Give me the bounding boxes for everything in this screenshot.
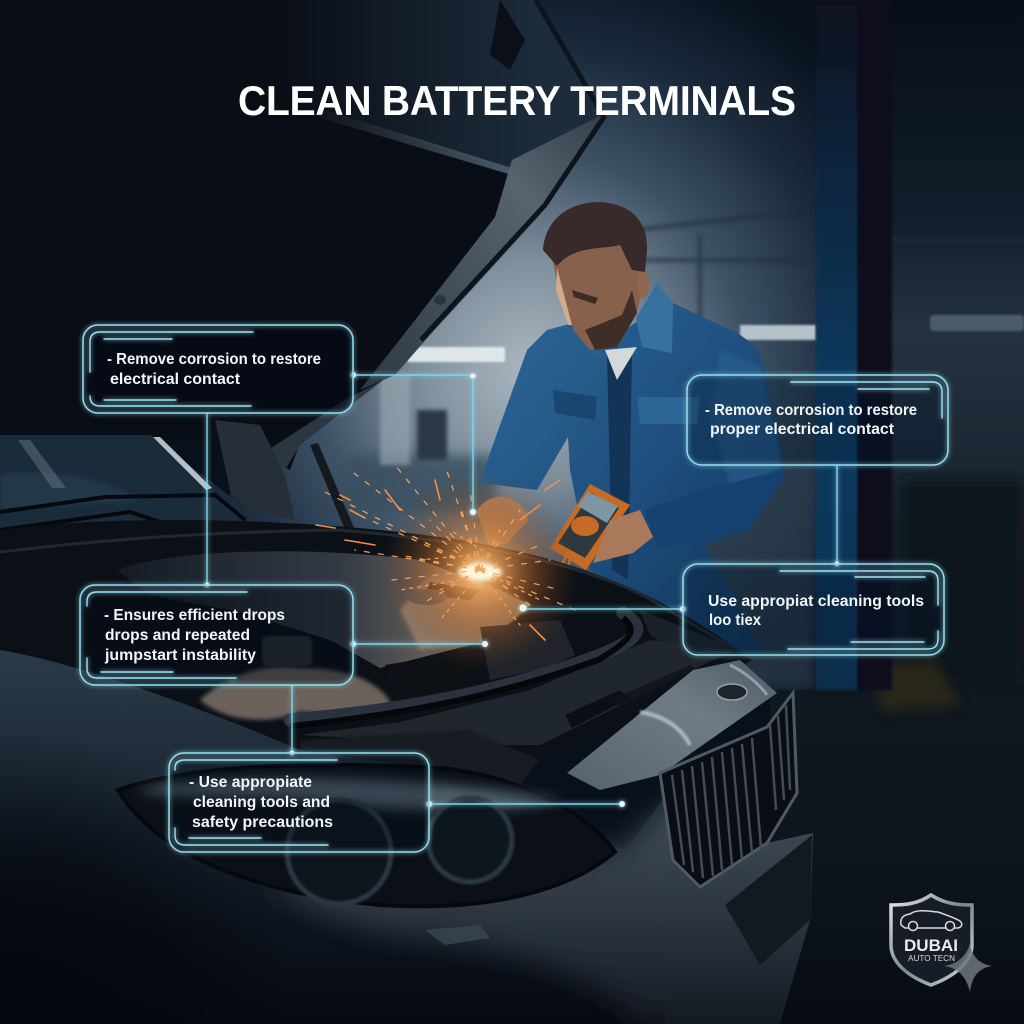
callout: efficient drops: - Ensures efficient drops: [104, 607, 285, 624]
floor: [770, 690, 1024, 1024]
callout: cleaning tools right: [683, 564, 944, 655]
icon: car outline: [901, 911, 962, 928]
logo: Dubai Auto Tech shield: AUTO TECN: [908, 954, 955, 963]
callout: remove corrosion left: electrical contact: [110, 371, 241, 388]
callout: remove corrosion right: - Remove corrosion to restore: [705, 402, 917, 419]
front nose panel: [567, 660, 777, 790]
car body: [0, 420, 813, 1024]
callout: efficient drops: [80, 585, 353, 685]
lift pillar: [816, 0, 892, 690]
fender and lower body: [0, 650, 812, 1024]
callout: tools and safety: [169, 753, 429, 852]
callout: remove corrosion left: - Remove corrosion to restore: [107, 351, 321, 368]
multimeter: [537, 484, 630, 624]
title: CLEAN BATTERY TERMINALS: [238, 77, 796, 124]
cowl panel: [300, 640, 733, 745]
callout: remove corrosion left: [83, 325, 353, 413]
windshield: [0, 435, 250, 530]
callout: cleaning tools right: Use appropiat cleaning tools: [708, 593, 924, 610]
ceiling lights: [407, 315, 1024, 362]
front bumper: [665, 780, 813, 1024]
mechanic: [477, 202, 785, 657]
callout: cleaning tools right: loo tiex: [709, 612, 761, 629]
sparks: [316, 465, 580, 672]
icon: sparkle mark: [944, 944, 992, 992]
head and face: [553, 240, 643, 350]
grille: [660, 693, 797, 887]
coolant reservoir: [200, 667, 392, 720]
callout: remove corrosion right: proper electrical contact: [710, 421, 895, 438]
callout: remove corrosion right: [687, 375, 948, 465]
right hand: [593, 510, 653, 563]
battery and engine parts: [385, 650, 477, 705]
headlight: [118, 765, 615, 906]
hair: [543, 202, 647, 272]
logo: Dubai Auto Tech shield: DUBAI: [904, 936, 958, 955]
engine cover: [117, 551, 530, 668]
callout: tools and safety: safety precautions: [192, 814, 333, 831]
connector lines: [204, 372, 840, 807]
left hand: [477, 497, 528, 550]
black hose: [290, 613, 637, 720]
wipers and cowl: [0, 495, 245, 532]
callout: tools and safety: cleaning tools and: [193, 794, 330, 811]
soft lit band under headlight: [270, 790, 690, 1024]
callout: efficient drops: drops and repeated: [105, 627, 250, 644]
callout: tools and safety: - Use appropiate: [189, 774, 312, 791]
open hood: [0, 0, 604, 470]
hood hinge and strut: [215, 420, 295, 520]
callout: efficient drops: jumpstart instability: [104, 647, 256, 664]
logo: Dubai Auto Tech shield: [891, 895, 972, 985]
jacket: [480, 283, 785, 657]
